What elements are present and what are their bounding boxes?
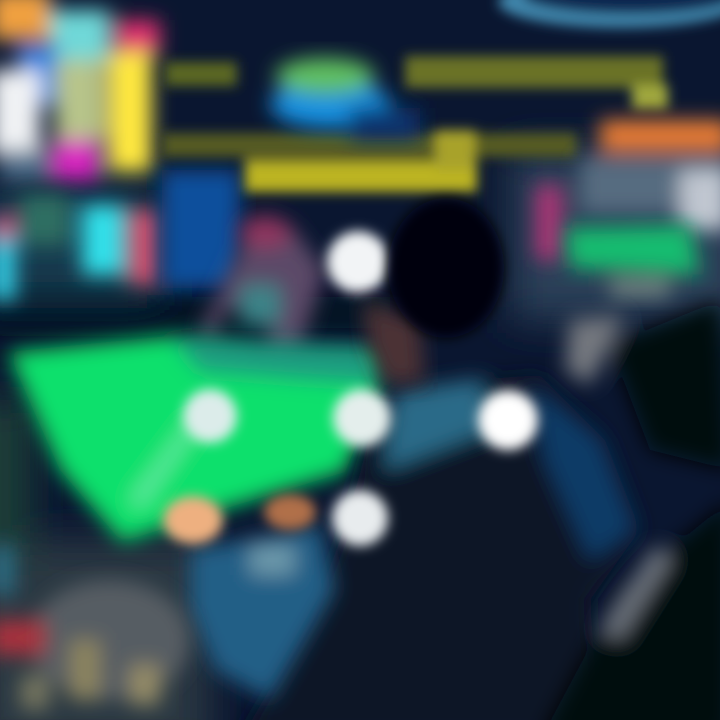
green panel, right <box>565 225 700 296</box>
chips, bottom left <box>0 545 190 710</box>
player hands <box>163 494 316 544</box>
player neck <box>362 300 425 385</box>
ambient colour wash <box>0 150 720 720</box>
blue panel <box>162 170 240 288</box>
top right light arc <box>498 0 720 28</box>
player body <box>240 375 640 720</box>
foreground figure, right <box>540 300 720 720</box>
logo, blue and green <box>270 58 420 140</box>
figure in background <box>200 216 325 360</box>
posters, mid left <box>0 195 160 300</box>
green table <box>8 335 385 542</box>
white chip glows <box>183 231 538 546</box>
heading, blurred yellow text <box>162 56 668 192</box>
posters, top left <box>0 0 160 180</box>
posters, top right <box>535 120 720 260</box>
player head <box>388 198 504 338</box>
player arm <box>190 525 335 700</box>
